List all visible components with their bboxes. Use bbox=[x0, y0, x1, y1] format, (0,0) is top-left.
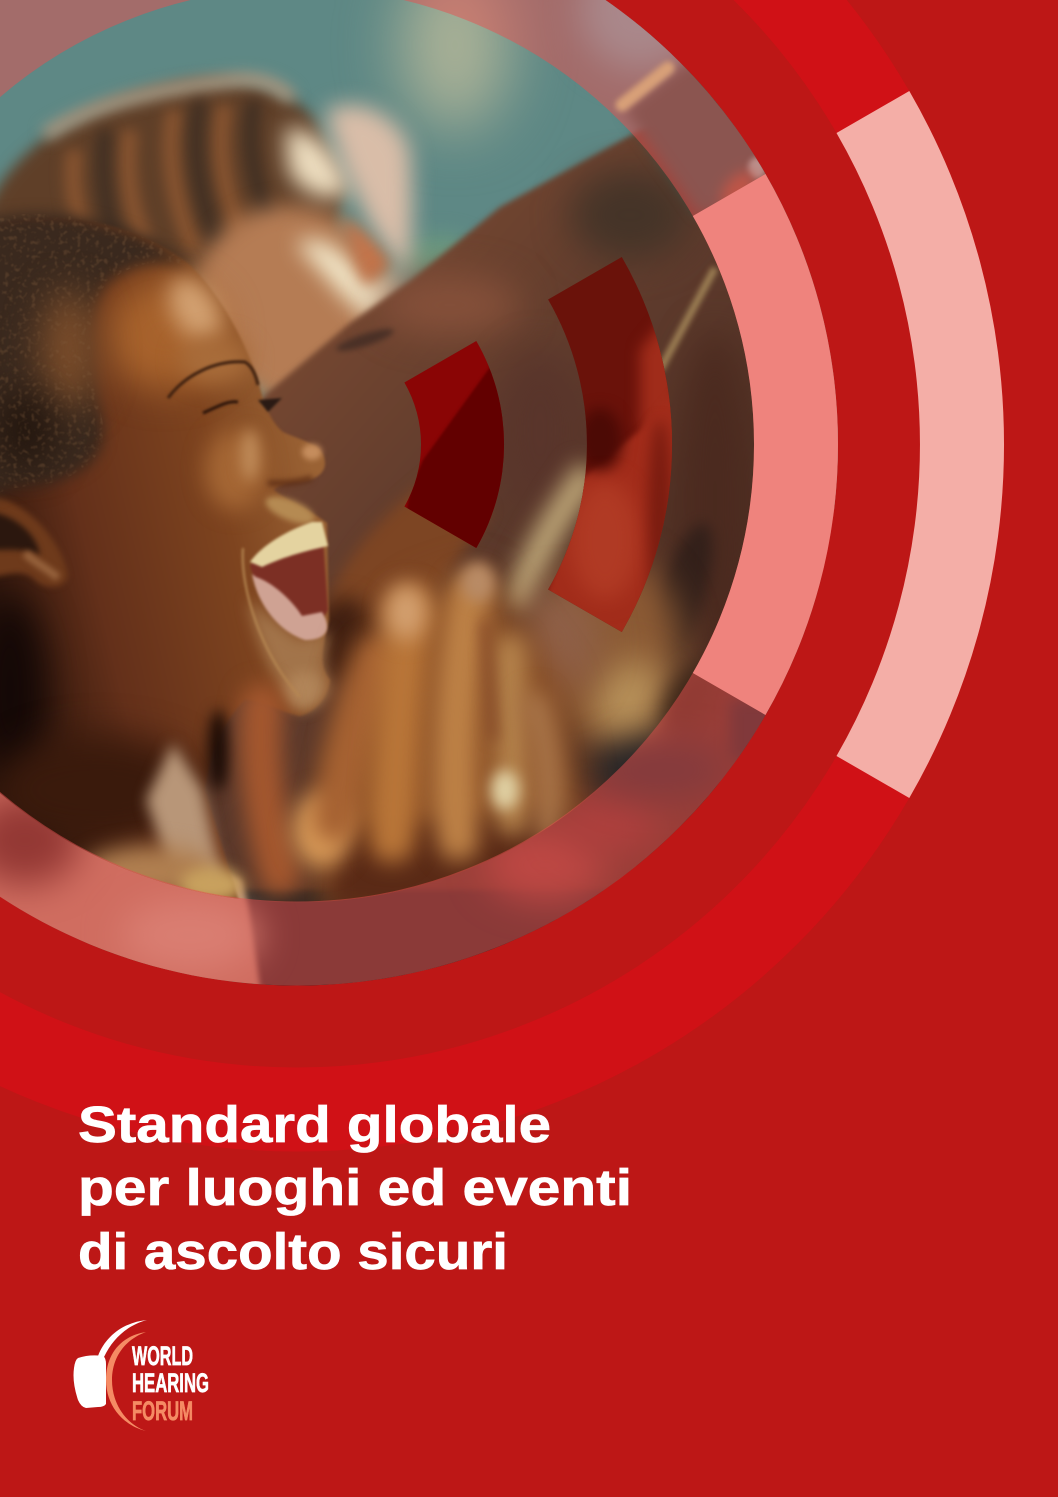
logo wordmark: HEARING bbox=[132, 1368, 209, 1398]
top right backdrop seen through the ring bbox=[622, 60, 790, 215]
pink middle arc bbox=[693, 174, 838, 715]
translucent red ring over photo bbox=[0, 0, 796, 944]
main woman: hair bbox=[0, 208, 190, 500]
bright red outer ring bbox=[0, 0, 962, 1110]
lit neck and chest bbox=[146, 743, 222, 885]
light pink outer arc bbox=[836, 91, 1004, 798]
small dark red sound wave arc bbox=[404, 341, 504, 548]
sky backdrop bbox=[0, 0, 890, 510]
logo wordmark: WORLD bbox=[132, 1341, 193, 1371]
title: di ascolto sicuri bbox=[78, 1223, 508, 1280]
logo wordmark bbox=[132, 1341, 209, 1426]
photo: singing concert crowd bbox=[0, 0, 890, 1000]
logo wordmark: FORUM bbox=[132, 1396, 193, 1426]
icon: orange sound arc bbox=[106, 1332, 146, 1431]
lower band of chest and palm bbox=[0, 698, 775, 986]
ear bbox=[0, 495, 68, 587]
eyebrow and eye bbox=[168, 362, 258, 398]
main woman: open mouth bbox=[250, 522, 328, 640]
title bbox=[78, 1096, 632, 1280]
raised arms and brown backdrop bbox=[0, 50, 820, 1000]
title: per luoghi ed eventi bbox=[78, 1159, 632, 1216]
large dark red sound wave arc bbox=[548, 257, 672, 632]
title: Standard globale bbox=[78, 1096, 551, 1153]
logo: World Hearing Forum bbox=[74, 1320, 209, 1431]
icon: headphone ear cup and band bbox=[74, 1320, 147, 1408]
main woman: face and neck bbox=[0, 218, 330, 920]
raised hands bbox=[261, 562, 610, 915]
background person bbox=[0, 79, 412, 410]
